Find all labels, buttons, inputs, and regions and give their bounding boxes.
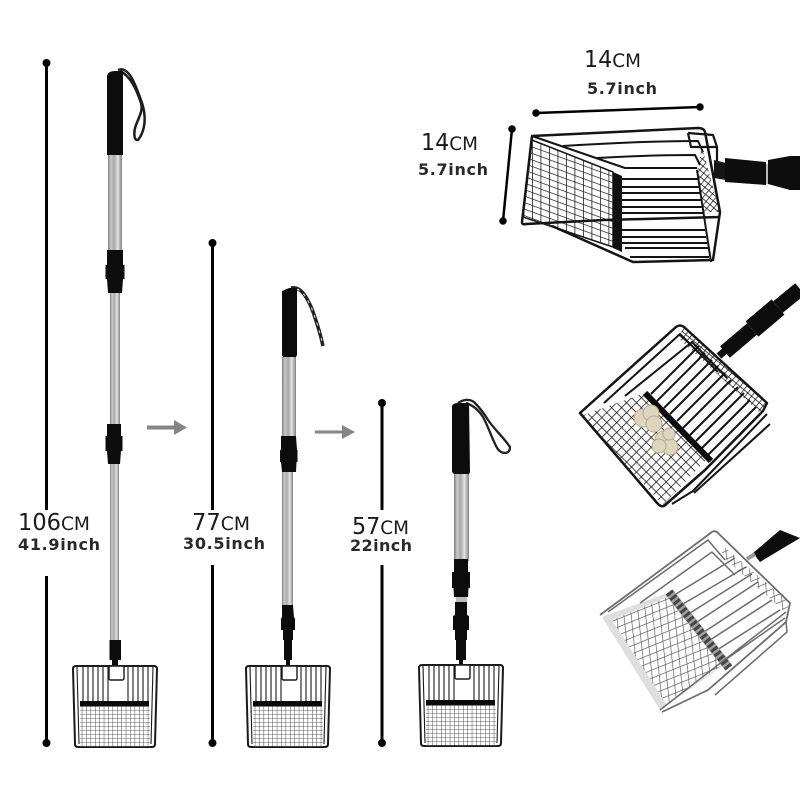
outer rim <box>600 531 790 712</box>
handle tab <box>688 133 717 165</box>
extended pole, 106 cm <box>106 69 145 666</box>
icon: wrist strap <box>118 69 145 140</box>
mid pole, 77 cm <box>280 288 323 666</box>
outer rim <box>522 128 720 262</box>
dimension line: 106 cm <box>44 60 49 746</box>
mesh plate <box>581 394 708 505</box>
icon: wrist strap <box>458 400 510 453</box>
curved wires <box>676 558 785 660</box>
mesh plate <box>523 140 613 247</box>
arrow: 77 to 57 <box>315 425 355 439</box>
label: 106 cm: 106CM <box>18 510 90 536</box>
scoop, front view 1 <box>73 666 157 747</box>
handle <box>719 289 800 356</box>
curved wires <box>621 179 709 257</box>
scoop, front view 3 <box>419 665 503 746</box>
dark bar <box>613 172 622 252</box>
label: scoop width: 14CM <box>584 47 641 73</box>
side hatch <box>697 147 720 212</box>
label: 106 cm <box>18 510 100 554</box>
label: 77 cm: 77CM <box>192 510 250 536</box>
label: 77 cm <box>183 510 265 553</box>
dimension line: 77 cm <box>210 240 215 746</box>
black scoop with litter <box>580 289 800 506</box>
label: 57 cm <box>350 514 412 555</box>
outer rim <box>580 326 767 506</box>
label: 77 cm: 30.5inch <box>183 534 265 553</box>
scoop, front view 2 <box>246 666 330 747</box>
litter clumps <box>634 405 678 455</box>
collapsed pole, 57 cm <box>452 400 510 665</box>
icon: wrist strap <box>291 288 323 346</box>
label: scoop width <box>584 47 657 98</box>
side hatch <box>678 327 767 413</box>
side hatch <box>722 545 790 612</box>
label: scoop height <box>418 130 488 179</box>
label: 57 cm: 57CM <box>352 514 409 540</box>
curved wires <box>651 346 756 455</box>
black handle <box>753 530 800 562</box>
label: scoop width: 5.7inch <box>587 79 657 98</box>
back layers <box>672 414 770 504</box>
label: scoop height: 14CM <box>421 130 478 156</box>
dark bar <box>645 393 711 461</box>
dimension line: scoop width <box>534 104 702 116</box>
mesh plate <box>602 592 727 710</box>
label: 106 cm: 41.9inch <box>18 535 100 554</box>
label: 57 cm: 22inch <box>350 536 412 555</box>
dark band <box>669 592 729 668</box>
handle connector <box>714 156 800 190</box>
arrow: 106 to 77 <box>147 420 187 435</box>
silver scoop <box>600 530 800 712</box>
black scoop, side view <box>522 128 800 262</box>
dimension line: scoop height <box>500 126 514 224</box>
label: scoop height: 5.7inch <box>418 160 488 179</box>
front rim wire <box>522 217 720 224</box>
dimension line: 57 cm <box>380 400 384 746</box>
